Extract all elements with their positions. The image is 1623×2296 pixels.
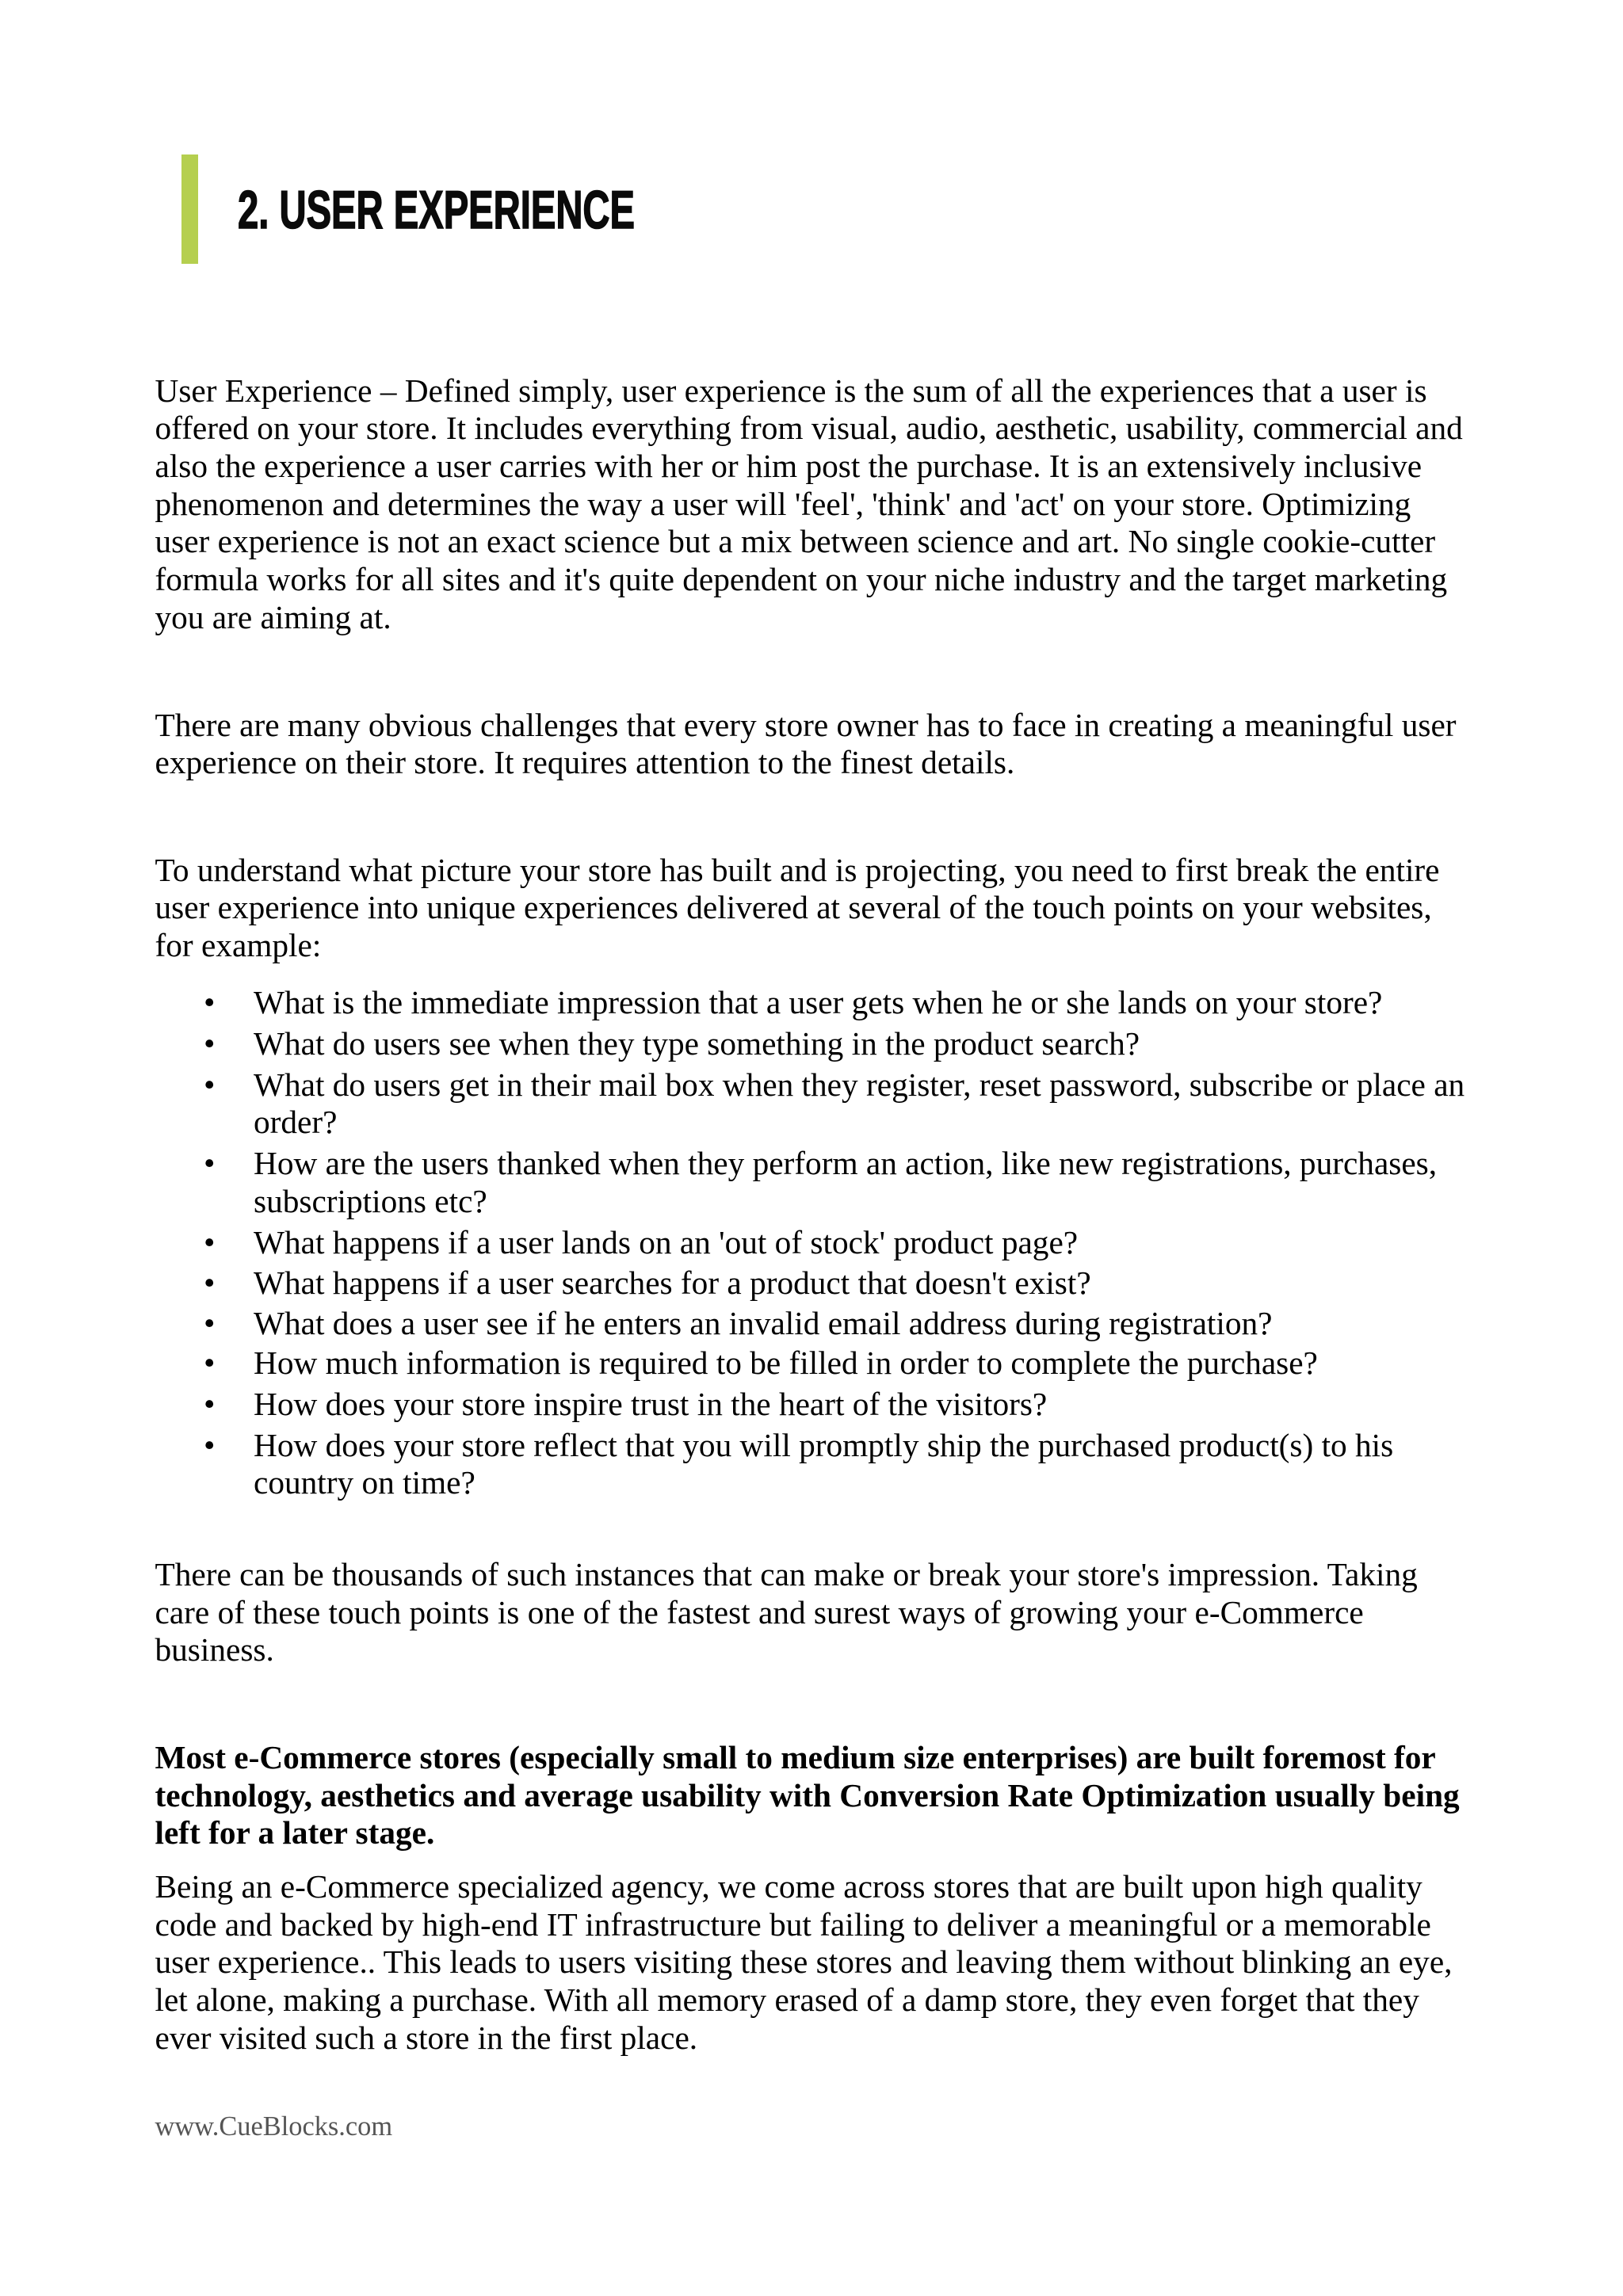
bullet list — [204, 984, 1465, 1501]
bullet 4: How are the users thanked when they perform an action, like new registrations, purchases, — [254, 1145, 1437, 1181]
paragraph: definition: also the experience a user carries with her or him post the purchase. It is an extensively inclusive — [155, 448, 1422, 484]
paragraph: touch points intro — [155, 851, 1440, 963]
bullet 6: What happens if a user searches for a product that doesn't exist? — [254, 1264, 1091, 1301]
paragraph: touch points intro: user experience into unique experiences delivered at several of the touch points on your websites, — [155, 889, 1432, 925]
paragraph: definition: User Experience – Defined simply, user experience is the sum of all the experiences that a user is — [155, 372, 1427, 409]
bold paragraph: conversion rate optimization: technology, aesthetics and average usability with Conversion Rate Optimization usually being — [155, 1777, 1460, 1814]
paragraph: definition: formula works for all sites and it's quite dependent on your niche industry and the target marketing — [155, 561, 1447, 597]
bullet 8: How much information is required to be filled in order to complete the purchase? — [254, 1344, 1318, 1381]
paragraph: agency experience: Being an e-Commerce specialized agency, we come across stores that are built upon high quality — [155, 1868, 1423, 1905]
paragraph: thousands of instances: care of these touch points is one of the fastest and surest ways of growing your e-Commerce — [155, 1594, 1364, 1630]
footer url: www.CueBlocks.com — [155, 2111, 392, 2142]
bullet 1: What is the immediate impression that a user gets when he or she lands on your store? — [254, 984, 1382, 1020]
bullet 2: What do users see when they type something in the product search? — [254, 1025, 1140, 1062]
paragraph: definition: you are aiming at. — [155, 599, 391, 635]
paragraph: challenges — [155, 707, 1457, 780]
bullet 5: What happens if a user lands on an 'out of stock' product page? — [254, 1224, 1078, 1261]
bold paragraph: conversion rate optimization: left for a later stage. — [155, 1814, 434, 1851]
paragraph: agency experience: ever visited such a store in the first place. — [155, 2019, 697, 2056]
paragraph: challenges: There are many obvious challenges that every store owner has to face in creating a meaningful user — [155, 707, 1457, 743]
bullet 9: How does your store inspire trust in the heart of the visitors? — [254, 1386, 1047, 1422]
paragraph: agency experience: let alone, making a purchase. With all memory erased of a damp store, they even forget that they — [155, 1981, 1419, 2018]
bullet 3: order? — [254, 1104, 337, 1140]
bullet 7: What does a user see if he enters an invalid email address during registration? — [254, 1305, 1273, 1341]
bold paragraph: conversion rate optimization — [155, 1739, 1460, 1851]
bullet 10 — [204, 1426, 1393, 1501]
paragraph: touch points intro: To understand what picture your store has built and is projecting, you need to first break the entire — [155, 851, 1440, 887]
bullet 3 — [204, 1066, 1465, 1140]
paragraph: thousands of instances: There can be thousands of such instances that can make or break your store's impression. Taking — [155, 1556, 1418, 1592]
bullet list: • — [204, 1305, 215, 1341]
paragraph: agency experience — [155, 1868, 1452, 2056]
paragraph: challenges: experience on their store. It requires attention to the finest details. — [155, 744, 1014, 780]
paragraph: agency experience: user experience.. This leads to users visiting these stores and leaving them without blinking an eye, — [155, 1943, 1452, 1980]
bullet 4: subscriptions etc? — [254, 1183, 487, 1219]
bullet list: • — [204, 984, 215, 1020]
paragraph: definition: phenomenon and determines the way a user will 'feel', 'think' and 'act' on your store. Optimizing — [155, 486, 1411, 522]
paragraph: definition: user experience is not an exact science but a mix between science and art. No single cookie-cutter — [155, 523, 1435, 559]
bullet list: • — [204, 1344, 215, 1381]
paragraph: thousands of instances: business. — [155, 1631, 274, 1668]
bullet list: • — [204, 1386, 215, 1422]
bullet 4 — [204, 1145, 1437, 1219]
bullet list: • — [204, 1426, 215, 1463]
bullet list: • — [204, 1224, 215, 1261]
bullet 10: country on time? — [254, 1464, 475, 1501]
paragraph: definition: offered on your store. It includes everything from visual, audio, aesthetic, usability, commercial and — [155, 410, 1463, 446]
bullet list: • — [204, 1025, 215, 1062]
bullet 10: How does your store reflect that you will promptly ship the purchased product(s) to his — [254, 1426, 1393, 1463]
bold paragraph: conversion rate optimization: Most e-Commerce stores (especially small to medium size enterprises) are built foremost for — [155, 1739, 1436, 1775]
accent bar — [181, 154, 198, 264]
bullet list: • — [204, 1066, 215, 1103]
bullet list: • — [204, 1264, 215, 1301]
paragraph: agency experience: code and backed by high-end IT infrastructure but failing to deliver a meaningful or a memorable — [155, 1906, 1431, 1943]
paragraph: thousands of instances — [155, 1556, 1418, 1668]
bullet 3: What do users get in their mail box when they register, reset password, subscribe or place an — [254, 1066, 1465, 1103]
bullet list: • — [204, 1145, 215, 1181]
paragraph: definition — [155, 372, 1463, 635]
paragraph: touch points intro: for example: — [155, 927, 321, 963]
